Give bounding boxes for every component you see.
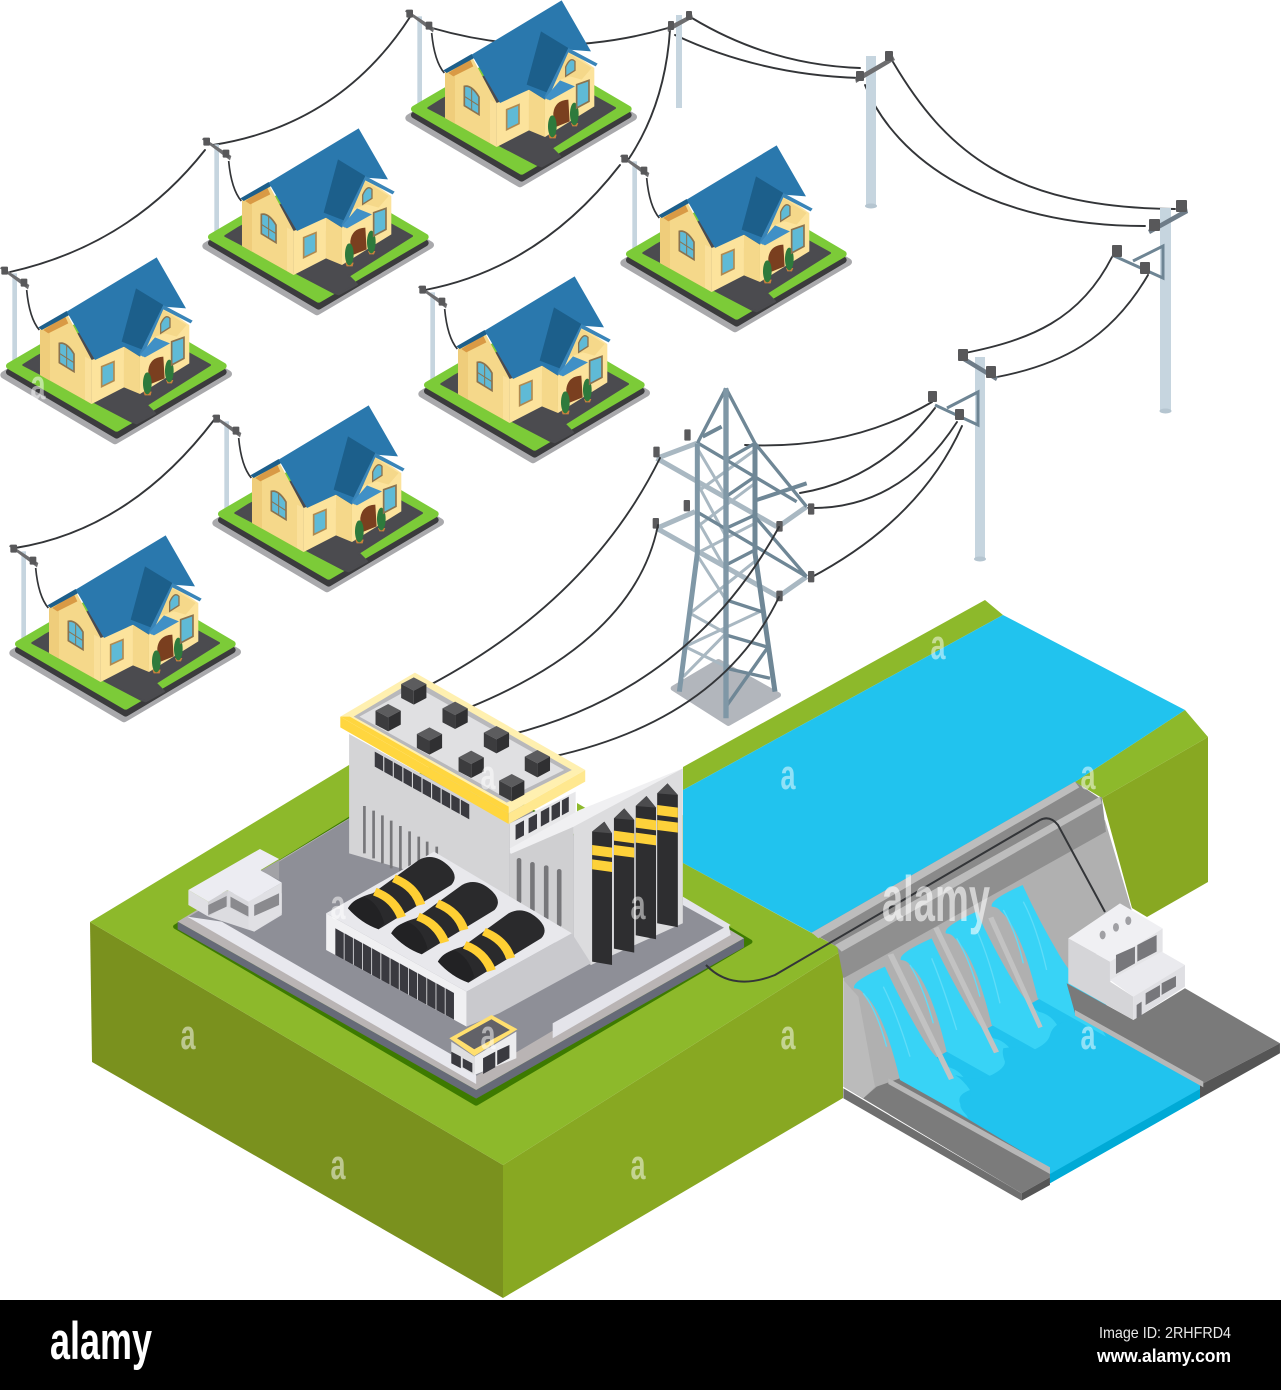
power lines from tower to plant [430,458,779,757]
footer logo: alamy [50,1312,152,1371]
transmission tower [653,388,814,723]
watermark: a [1080,1011,1096,1058]
house 5 [212,405,440,589]
watermark: a [1080,751,1096,798]
watermark: a [480,1011,496,1058]
watermark: alamy [882,863,990,935]
downstream water [900,983,1200,1183]
switch house [1068,903,1185,1020]
river block: grass bank and reservoir [683,600,1208,933]
house 3: right [620,145,848,329]
utility pole: far right with brace [1112,200,1188,414]
main generator hall walls [349,734,683,965]
house 4: centre [418,276,646,460]
utility pole: near tower with brace [928,349,998,562]
watermark: a [630,881,646,928]
cable from plant to switch house [706,818,1105,982]
rooftop with yellow parapet [340,673,585,824]
black and yellow penstock columns [592,783,678,965]
riverbank curbs [888,1010,1203,1174]
watermark: a [180,1011,196,1058]
house 7: lower left [9,535,237,719]
watermark: a [480,751,496,798]
website: www.alamy.com [1096,1346,1231,1366]
hydroelectric power plant [176,673,750,1103]
concrete slab [176,760,750,1103]
house 2 [202,128,430,312]
left annex building [188,849,282,932]
plant ground block [90,765,843,1298]
footer bar [0,1300,1281,1390]
road strip under switch house [1067,983,1200,1085]
watermark: a [30,361,46,408]
gatehouse [449,1015,517,1075]
utility pole: tall centre [855,51,895,208]
watermark: a [330,1141,346,1188]
watermark: a [780,751,796,798]
watermark [30,361,1096,1188]
power lines between houses and poles [10,17,1175,578]
dam concrete wall [812,782,1132,1098]
house 6: far left [0,257,228,441]
utility pole: top right [667,11,693,108]
turbine hall [326,852,591,1027]
watermark: a [930,621,946,668]
watermark: a [630,1141,646,1188]
watermark: a [780,1011,796,1058]
watermark: a [330,881,346,928]
rooftop transformer boxes [376,677,550,801]
road and downstream apron [843,983,1280,1201]
image id: Image ID: 2RHFRD4 [1099,1325,1231,1342]
four spillway waterfalls [854,885,1200,1174]
hydro dam [812,782,1280,1201]
house 1: top [405,0,633,184]
